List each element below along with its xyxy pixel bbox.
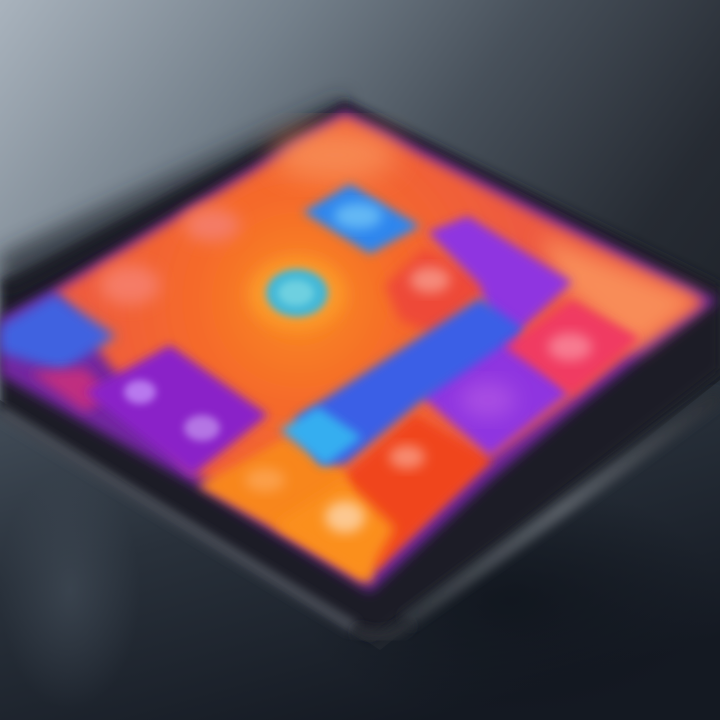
tile: red right of centre xyxy=(385,248,490,335)
tile: right orange xyxy=(540,235,700,350)
tile: cyan end of bar xyxy=(280,407,362,466)
tile: blue diagonal bar xyxy=(295,298,525,464)
tile: top orange glow xyxy=(273,129,397,181)
screen: main orange area xyxy=(55,116,705,578)
background: lower surface xyxy=(0,380,720,720)
tile: red bottom right of bar xyxy=(340,415,492,570)
tile: purple lower right and upper band xyxy=(420,216,572,456)
tile: left soft red tile xyxy=(100,265,160,305)
tile: upper soft tile xyxy=(184,208,240,242)
tile: top blue xyxy=(303,184,420,254)
tile: magenta strip xyxy=(30,368,110,412)
tile: left blue xyxy=(0,294,116,372)
screen: purple edge glow xyxy=(0,110,718,592)
tile: centre ring xyxy=(249,258,345,330)
tile: pink xyxy=(505,300,640,395)
tile: bottom orange xyxy=(198,438,372,582)
tablet body xyxy=(0,95,720,640)
tile: purple lower left xyxy=(85,345,268,476)
tablet screen xyxy=(0,110,718,592)
